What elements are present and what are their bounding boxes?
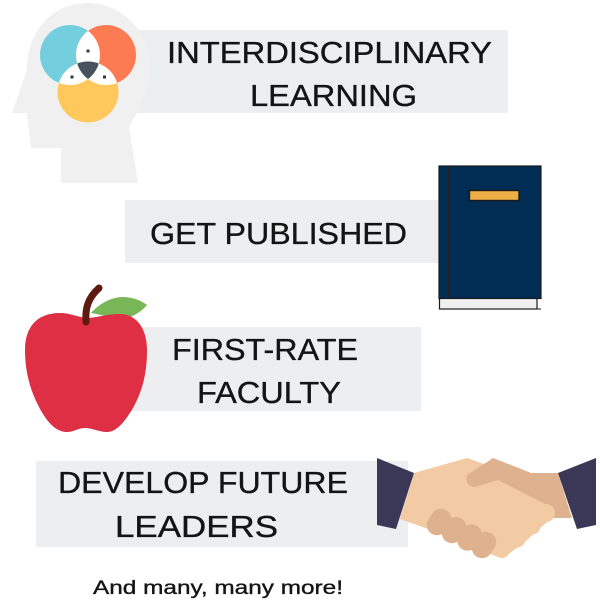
heading: develop future leaders xyxy=(58,465,348,544)
right forearm xyxy=(480,458,572,518)
thumb of dark hand xyxy=(466,458,531,490)
heading: first-rate faculty xyxy=(172,332,358,410)
banner: get published xyxy=(125,200,440,263)
icon: apple xyxy=(25,288,147,432)
banner: interdisciplinary learning xyxy=(135,30,508,113)
banner: develop future leaders xyxy=(36,461,408,547)
heading: interdisciplinary learning xyxy=(167,35,492,113)
icon: handshake xyxy=(377,458,596,558)
heading: interdisciplinary learning: INTERDISCIPLINARY xyxy=(167,35,492,70)
closing note: And many, many more! xyxy=(93,578,343,599)
icon: head with venn diagram xyxy=(12,3,150,183)
light hand xyxy=(400,458,555,558)
apple body xyxy=(25,313,147,432)
icon: book xyxy=(439,166,541,309)
heading: develop future leaders: DEVELOP FUTURE xyxy=(58,465,348,500)
heading: develop future leaders: LEADERS xyxy=(115,509,278,544)
banner: first-rate faculty xyxy=(130,327,421,411)
heading: first-rate faculty: FIRST-RATE xyxy=(172,332,358,367)
stem xyxy=(86,288,99,322)
heading: get published: GET PUBLISHED xyxy=(150,216,407,251)
left cuff xyxy=(377,458,414,529)
right cuff xyxy=(558,458,596,529)
dark fingers xyxy=(437,519,486,548)
heading: first-rate faculty: FACULTY xyxy=(197,375,341,410)
leaf xyxy=(91,297,147,318)
heading: interdisciplinary learning: LEARNING xyxy=(250,78,417,113)
venn circles xyxy=(40,25,136,122)
